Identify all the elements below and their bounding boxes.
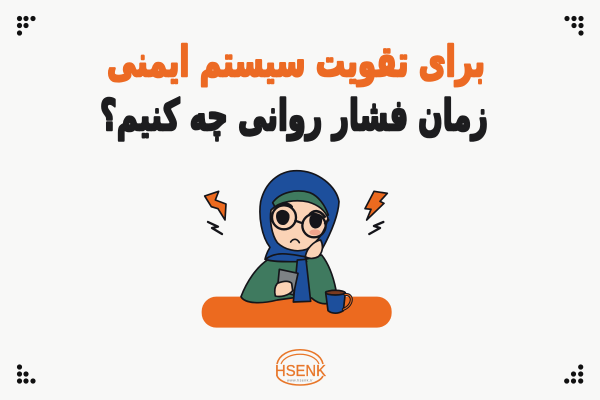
mouth	[291, 239, 299, 243]
icon: right small spark	[369, 222, 383, 234]
phone	[277, 269, 298, 295]
face	[270, 201, 328, 251]
mug	[326, 291, 345, 313]
sweater	[241, 255, 336, 304]
illustration: stressed woman at table	[202, 171, 392, 328]
logo url: www.hsenk.ir	[287, 378, 313, 382]
eyes	[277, 211, 289, 224]
scarf tail	[293, 259, 311, 302]
blush	[309, 229, 321, 235]
icon: right lightning bolt	[365, 191, 387, 220]
corner dots: bottom right	[564, 364, 583, 384]
hand holding phone	[275, 281, 293, 296]
glasses	[272, 205, 328, 237]
corner dots: top left	[17, 16, 36, 36]
icon: left small spark	[208, 222, 222, 234]
corner dots: bottom left	[17, 364, 36, 384]
undercap	[273, 191, 328, 218]
scarf drape	[265, 254, 307, 262]
table	[202, 297, 392, 328]
icon: left lightning bolt	[205, 191, 226, 220]
hijab	[260, 171, 339, 261]
logo wordmark: HSENK	[275, 363, 327, 380]
logo inner arc	[281, 354, 319, 364]
eyebrows	[277, 204, 292, 207]
hand on cheek	[305, 240, 322, 258]
logo outer arcs	[277, 350, 323, 385]
logo: HSENK	[275, 350, 327, 385]
corner dots: top right	[564, 16, 584, 36]
